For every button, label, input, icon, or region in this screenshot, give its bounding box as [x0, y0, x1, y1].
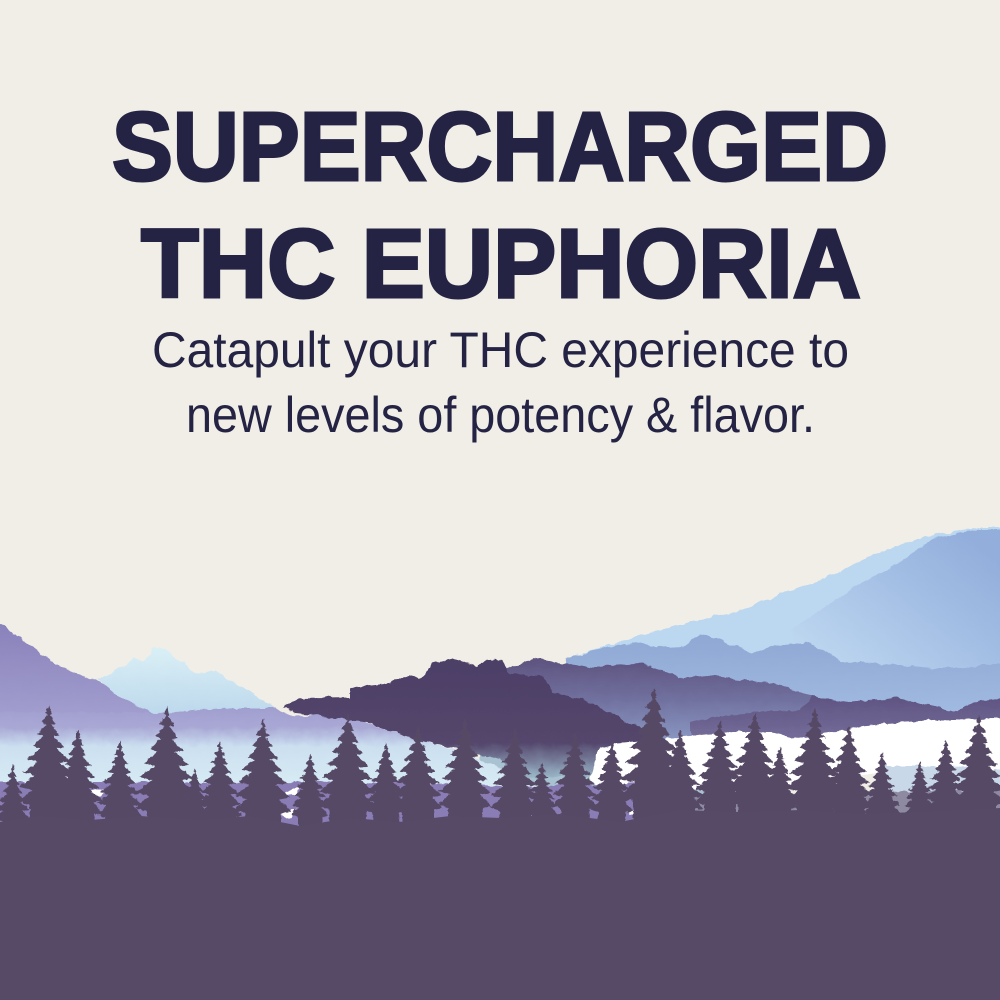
big pale blue mountain: [567, 527, 1000, 700]
dark foreground mountain: [282, 658, 650, 778]
subtitle: new levels of potency & flavor.: [186, 387, 815, 443]
misty lake band: [0, 708, 540, 805]
dark purple ridge: [690, 696, 1000, 760]
mountain landscape: [0, 527, 1000, 805]
left violet mountain: [0, 623, 170, 735]
subtitle: Catapult your THC experience to: [152, 322, 849, 378]
blue ridge band: [560, 635, 1000, 730]
pine tree line: [0, 688, 1000, 846]
headline: THC EUPHORIA: [141, 209, 861, 318]
white snowfield: [590, 718, 1000, 790]
pale peak: [97, 647, 275, 720]
headline: [112, 92, 888, 318]
headline: SUPERCHARGED: [112, 92, 888, 201]
white flecks: [88, 788, 104, 796]
lavender undergrowth: [0, 782, 1000, 830]
pale blue snow shadow: [880, 766, 1000, 795]
backing wash behind the trees: [480, 745, 720, 805]
forest ground: [0, 808, 1000, 1000]
big blue mountain face: [790, 529, 1000, 670]
purple-blue range: [498, 658, 812, 760]
subtitle: [152, 322, 849, 443]
